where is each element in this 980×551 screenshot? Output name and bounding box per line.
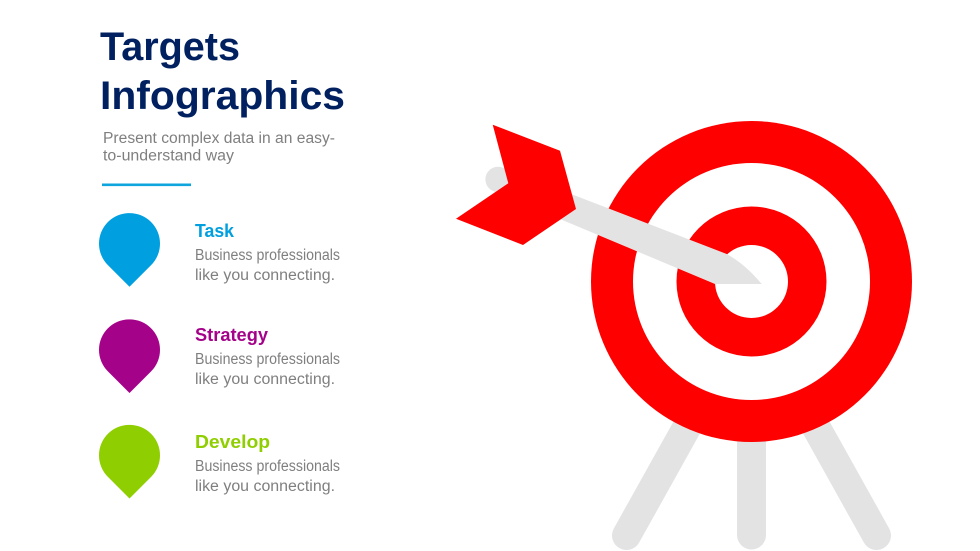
heading: Develop: Develop [195, 431, 270, 452]
target rings [591, 121, 912, 442]
title: Targets [100, 25, 240, 69]
text: Strategy description [195, 351, 340, 388]
text: Develop description: Business professionals [195, 458, 340, 475]
item: Develop [99, 425, 340, 498]
subtitle text: Present complex data in an easy- [103, 130, 335, 147]
text: Strategy description: like you connecting. [195, 371, 335, 388]
subtitle text [103, 130, 335, 164]
text: Develop description [195, 458, 340, 495]
target stand legs [626, 427, 876, 536]
subtitle text: to-understand way [103, 148, 234, 164]
heading: Task: Task [195, 220, 235, 241]
text: Task description: Business professionals [195, 247, 340, 264]
text: Task description: like you connecting. [195, 267, 335, 284]
icon: green pin [99, 425, 160, 498]
text: Strategy description: Business professionals [195, 351, 340, 368]
arrow fletching [456, 125, 576, 245]
item: Strategy [99, 319, 340, 393]
arrow [456, 125, 762, 284]
icon: purple pin [99, 319, 160, 393]
title [100, 25, 345, 118]
text: Develop description: like you connecting. [195, 478, 335, 495]
accent rule [102, 184, 191, 186]
target illustration [456, 121, 912, 536]
item: Task [99, 213, 340, 287]
heading: Strategy: Strategy [195, 324, 269, 345]
text: Task description [195, 247, 340, 284]
title: Infographics [100, 74, 345, 118]
icon: blue pin [99, 213, 160, 287]
arrow shaft [485, 167, 762, 284]
